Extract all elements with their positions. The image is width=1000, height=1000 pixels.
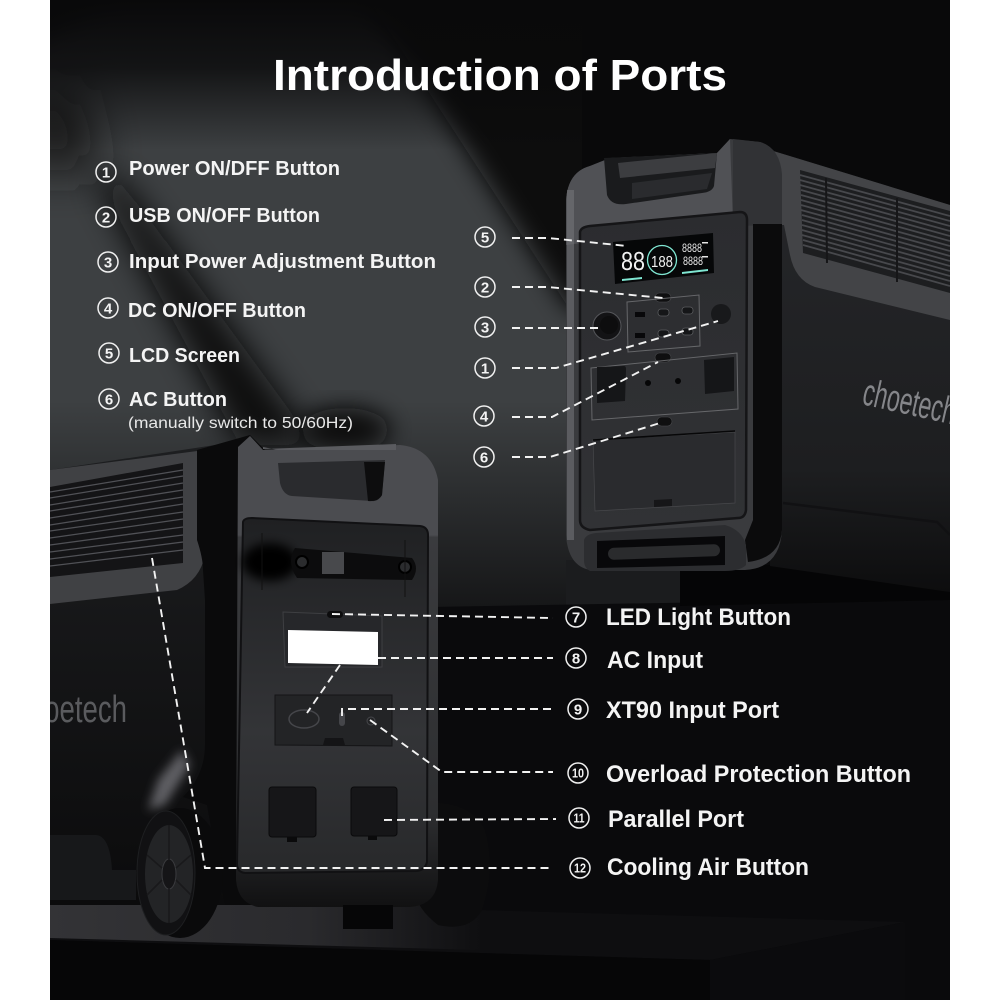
rear panel face: [237, 518, 428, 873]
marker 4: [474, 406, 494, 426]
legend item 6: AC Button: [129, 389, 227, 411]
LCD screen: 8888: [683, 254, 703, 268]
USB port group: [627, 295, 700, 352]
LCD screen: 88: [621, 246, 645, 276]
AC button: [657, 417, 672, 426]
legend item 3: Input Power Adjustment Button: [129, 251, 436, 273]
LED light panel: [283, 611, 382, 667]
legend item 1: 1: [102, 164, 110, 182]
cable holder: [242, 533, 416, 597]
DC ON/OFF button: [655, 353, 671, 362]
legend item 8: [566, 647, 703, 674]
wheel arch highlight: [148, 750, 190, 810]
marker 4: 4: [480, 408, 489, 426]
input power knob: [593, 312, 621, 340]
legend item 8: 8: [572, 650, 580, 668]
side light band: [50, 450, 205, 604]
plinth lower right: [50, 905, 461, 949]
legend item 10: 10: [572, 766, 584, 780]
marker 6: [474, 447, 494, 467]
legend item 2: USB ON/OFF Button: [129, 205, 320, 227]
product: rear-facing power station (lower left): [50, 435, 455, 938]
AC input recess: [275, 695, 392, 746]
legend item 5: LCD Screen: [129, 345, 240, 367]
legend item 2: 2: [102, 210, 110, 226]
legend item 9: 9: [574, 702, 582, 718]
lower battery cover: [593, 431, 735, 511]
legend item 7: 7: [572, 610, 580, 626]
legend item 4: DC ON/OFF Button: [128, 300, 306, 322]
marker 5: [475, 227, 495, 247]
legend item 4: 4: [104, 300, 113, 318]
marker 3: [475, 317, 495, 337]
marker 2: [475, 277, 495, 297]
bottom handle: [584, 525, 746, 571]
floor platform: [438, 602, 686, 650]
feet shadow: [680, 571, 686, 603]
marker 6: 6: [480, 450, 488, 466]
front shell: [236, 436, 438, 907]
top handle: [278, 460, 385, 501]
parallel port covers: [269, 787, 397, 842]
marker 1: [475, 358, 495, 378]
front shell: [566, 139, 782, 570]
light beams backdrop: [50, 49, 680, 607]
left wheel: [137, 808, 223, 938]
legend item 6: [99, 389, 353, 432]
legend item 10: Overload Protection Button: [606, 761, 911, 788]
title: Introduction of Ports: [273, 51, 727, 100]
power button: [711, 304, 731, 324]
legend item 6: (manually switch to 50/60Hz): [128, 415, 353, 432]
legend item 11: 11: [574, 812, 585, 826]
dark corner strip: [197, 435, 265, 905]
leader lines upper unit: [512, 238, 718, 457]
marker 3: 3: [481, 320, 489, 336]
LED light button: [327, 611, 343, 618]
logo left unit: choetech: [15, 689, 127, 731]
shell dark strip: [745, 224, 782, 562]
legend item 12: Cooling Air Button: [607, 854, 809, 881]
side vents: [800, 170, 950, 293]
LCD screen: 8888: [682, 241, 702, 255]
side body: [50, 445, 225, 905]
legend item 11: Parallel Port: [608, 806, 744, 833]
legend item 12: 12: [574, 862, 586, 876]
legend item 1: Power ON/DFF Button: [129, 158, 340, 180]
side groove: [783, 502, 850, 510]
control panel face: [580, 212, 747, 530]
LED light bar: [288, 630, 378, 665]
LCD screen: [613, 233, 714, 284]
marker 1: 1: [481, 360, 489, 378]
legend item 9: XT90 Input Port: [606, 697, 779, 724]
marker 5: 5: [481, 230, 489, 246]
lower skirt: [50, 835, 136, 900]
legend item 5: 5: [105, 346, 113, 362]
legend item 6: 6: [105, 392, 113, 408]
LCD screen: 188: [651, 254, 673, 271]
legend item 8: AC Input: [607, 647, 703, 674]
bottom foot: [343, 905, 393, 929]
right wheel: [420, 885, 455, 926]
legend item 3: 3: [104, 254, 112, 272]
USB ON/OFF button: [655, 293, 671, 302]
side light band: [770, 150, 950, 320]
side body: [770, 225, 950, 592]
side vents: [50, 463, 183, 577]
product: front-facing power station (upper right): [566, 139, 960, 606]
AC outlet group: [591, 353, 738, 420]
marker 2: 2: [481, 280, 489, 296]
leader lines lower unit: [152, 558, 556, 868]
legend item 7: LED Light Button: [606, 604, 791, 631]
top handle: [604, 153, 717, 204]
